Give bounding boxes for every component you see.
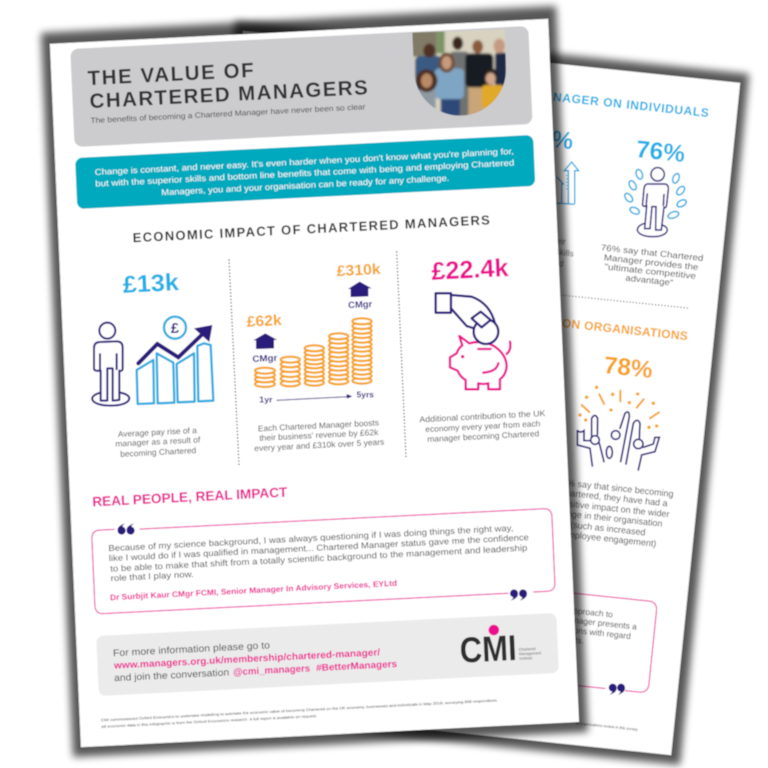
- quote mark: [609, 684, 625, 695]
- quote text: [514, 599, 639, 651]
- cta text: For more information please go to: [113, 640, 270, 659]
- footnote: [101, 698, 498, 729]
- text: 78% description: employee engagement): [562, 529, 657, 549]
- cta social: @cmi_managers: [233, 663, 310, 678]
- caption: revenue: [253, 418, 384, 453]
- dotted dividers: [229, 252, 406, 465]
- divider: [560, 295, 688, 308]
- quote text: [108, 522, 530, 583]
- quote text: a Chartered Manager presents a: [516, 609, 638, 632]
- intro banner: Managers, you and your organisation can be ready for any challenge.: [161, 173, 450, 197]
- caption: contribution: [419, 409, 547, 444]
- caption: pay rise: manager as a result of: [115, 435, 201, 449]
- text: 78% description: (such as increased: [570, 520, 646, 537]
- label: CMgr high: CMgr: [348, 299, 373, 310]
- timeline axis: 5yrs: [357, 391, 375, 400]
- icon: rising bars and arrow: £: [171, 321, 179, 337]
- quote text: results.: [557, 633, 585, 646]
- text: 76% description: 76% say that Chartered: [600, 242, 704, 263]
- caption: pay rise: Average pay rise of a: [118, 426, 198, 439]
- text: 78% description: 78% say that since becoming: [557, 477, 674, 499]
- text: 76% description: [598, 242, 704, 291]
- footnote: CMI commissioned Oxford Economics to undertake modelling to estimate the economic value of becoming Chartered on the UK economy, businesses and individuals in May 2018, surveying 836 respondents.: [101, 698, 498, 722]
- section heading: ECONOMIC IMPACT OF CHARTERED MANAGERS: [132, 212, 490, 245]
- CMI logo: Management: [519, 651, 542, 656]
- CMI logo: Institute: [519, 656, 533, 661]
- icon: person with laurel: [623, 168, 687, 237]
- cta link: www.managers.org.uk/membership/chartered-manager/: [113, 647, 381, 672]
- quote text: a holistic approach to: [534, 601, 614, 620]
- footnote: of organisations review in this survey.: [576, 721, 638, 732]
- header panel: [70, 26, 533, 147]
- stat: 22.4k: £22.4k: [431, 254, 509, 286]
- heading: impact on organisations: THE IMPACT OF A CHARTERED MANAGER ON ORGANISATIONS: [301, 289, 688, 343]
- text: 78% description: positive impact on the wider: [559, 498, 670, 519]
- icon: celebrating hands: [577, 386, 659, 470]
- left column text fragment: [538, 234, 575, 270]
- caption: pay rise: becoming Chartered: [120, 446, 197, 459]
- label: CMgr low: CMgr: [252, 353, 278, 364]
- back page: [177, 31, 740, 755]
- timeline axis: 1yr: [259, 396, 273, 405]
- cta social: #BetterManagers: [316, 659, 397, 674]
- front page: [50, 19, 579, 747]
- text: 76% description: Manager provides the: [603, 252, 699, 272]
- title: CHARTERED MANAGERS: [89, 76, 368, 113]
- left column text fragment: and: [549, 257, 564, 269]
- heading: real people: REAL PEOPLE, REAL IMPACT: [92, 485, 288, 509]
- quote text: organisations with regard: [537, 621, 632, 641]
- quote text: Because of my science background, I was always questioning if I was doing things the right way,: [108, 523, 514, 553]
- quote box: [219, 557, 657, 693]
- quote text: role that I play now.: [110, 569, 194, 583]
- attribution: Dr Surbjit Kaur CMgr FCMI, Senior Manager In Advisory Services, EYLtd: [110, 579, 397, 602]
- CMI logo: Chartered: [519, 647, 536, 652]
- stat: 310k: £310k: [336, 261, 382, 280]
- caption: revenue: every year and £310k over 5 years: [254, 438, 384, 453]
- text: 78% description: [550, 477, 674, 550]
- quote panel: [92, 507, 555, 614]
- icon: piggy bank with hand and coin: [436, 293, 510, 389]
- quote text: like I would do if I was qualified in management... Chartered Manager status gave me the confidence: [109, 532, 529, 563]
- text: 78% description: Chartered, they have had a: [559, 487, 669, 509]
- icon: rising bars and arrow: [137, 317, 213, 404]
- quote text: to be able to make that shift from a totally scientific background to the management and leadership: [110, 543, 528, 574]
- caption: contribution: Additional contribution to the UK: [419, 409, 546, 424]
- title: THE VALUE OF: [87, 59, 254, 90]
- timeline axis: [259, 391, 375, 405]
- text: 76% description: advantage": [625, 273, 674, 288]
- caption: pay rise: [115, 426, 202, 459]
- caption: revenue: their business' revenue by £62k: [259, 428, 379, 443]
- stat: 78%: 78%: [602, 352, 654, 384]
- left column text fragment: and skills: [539, 245, 574, 259]
- intro banner: but with the superior skills and bottom line benefits that come with being and employing Chartered: [95, 157, 515, 189]
- stat: 13k: £13k: [122, 269, 180, 299]
- photo: group of managers: [412, 30, 506, 116]
- cta social: [114, 659, 397, 684]
- CMI logo: CMI: [459, 627, 518, 671]
- icon: arrows: [552, 162, 579, 204]
- icon: person on base: [92, 323, 129, 406]
- quote mark: opening: [118, 523, 135, 535]
- left column text fragment: their: [549, 235, 567, 247]
- stat: 62k: £62k: [246, 312, 283, 331]
- chart: coin stacks: [255, 318, 372, 387]
- heading: impact on individuals: THE IMPACT OF A CHARTERED MANAGER ON INDIVIDUALS: [332, 67, 709, 120]
- caption: contribution: economy every year from each: [425, 419, 541, 434]
- subtitle: The benefits of becoming a Chartered Manager have never been so clear: [90, 102, 366, 125]
- call to action panel: [96, 613, 559, 696]
- quote mark: closing: [510, 589, 527, 601]
- stat: left percent: %: [550, 126, 574, 155]
- footnote: All economic data in this infographic is from the Oxford Economics research. A full report is available on request.: [101, 714, 317, 729]
- caption: revenue: Each Chartered Manager boosts: [258, 418, 379, 433]
- text: 78% description: change in their organisation: [552, 507, 663, 529]
- back page shadow: [168, 21, 749, 765]
- title: [87, 53, 368, 113]
- intro banner: Change is constant, and never easy. It's even harder when you don't know what you're planning for,: [95, 146, 514, 177]
- text: 76% description: "ultimate competitive: [604, 261, 697, 281]
- stat: 76%: 76%: [635, 136, 686, 168]
- caption: contribution: manager becoming Chartered: [427, 429, 540, 444]
- cta social: and join the conversation: [114, 667, 229, 684]
- icon: houses: [253, 282, 372, 349]
- intro banner: [75, 135, 535, 209]
- front page shadow: [41, 6, 588, 757]
